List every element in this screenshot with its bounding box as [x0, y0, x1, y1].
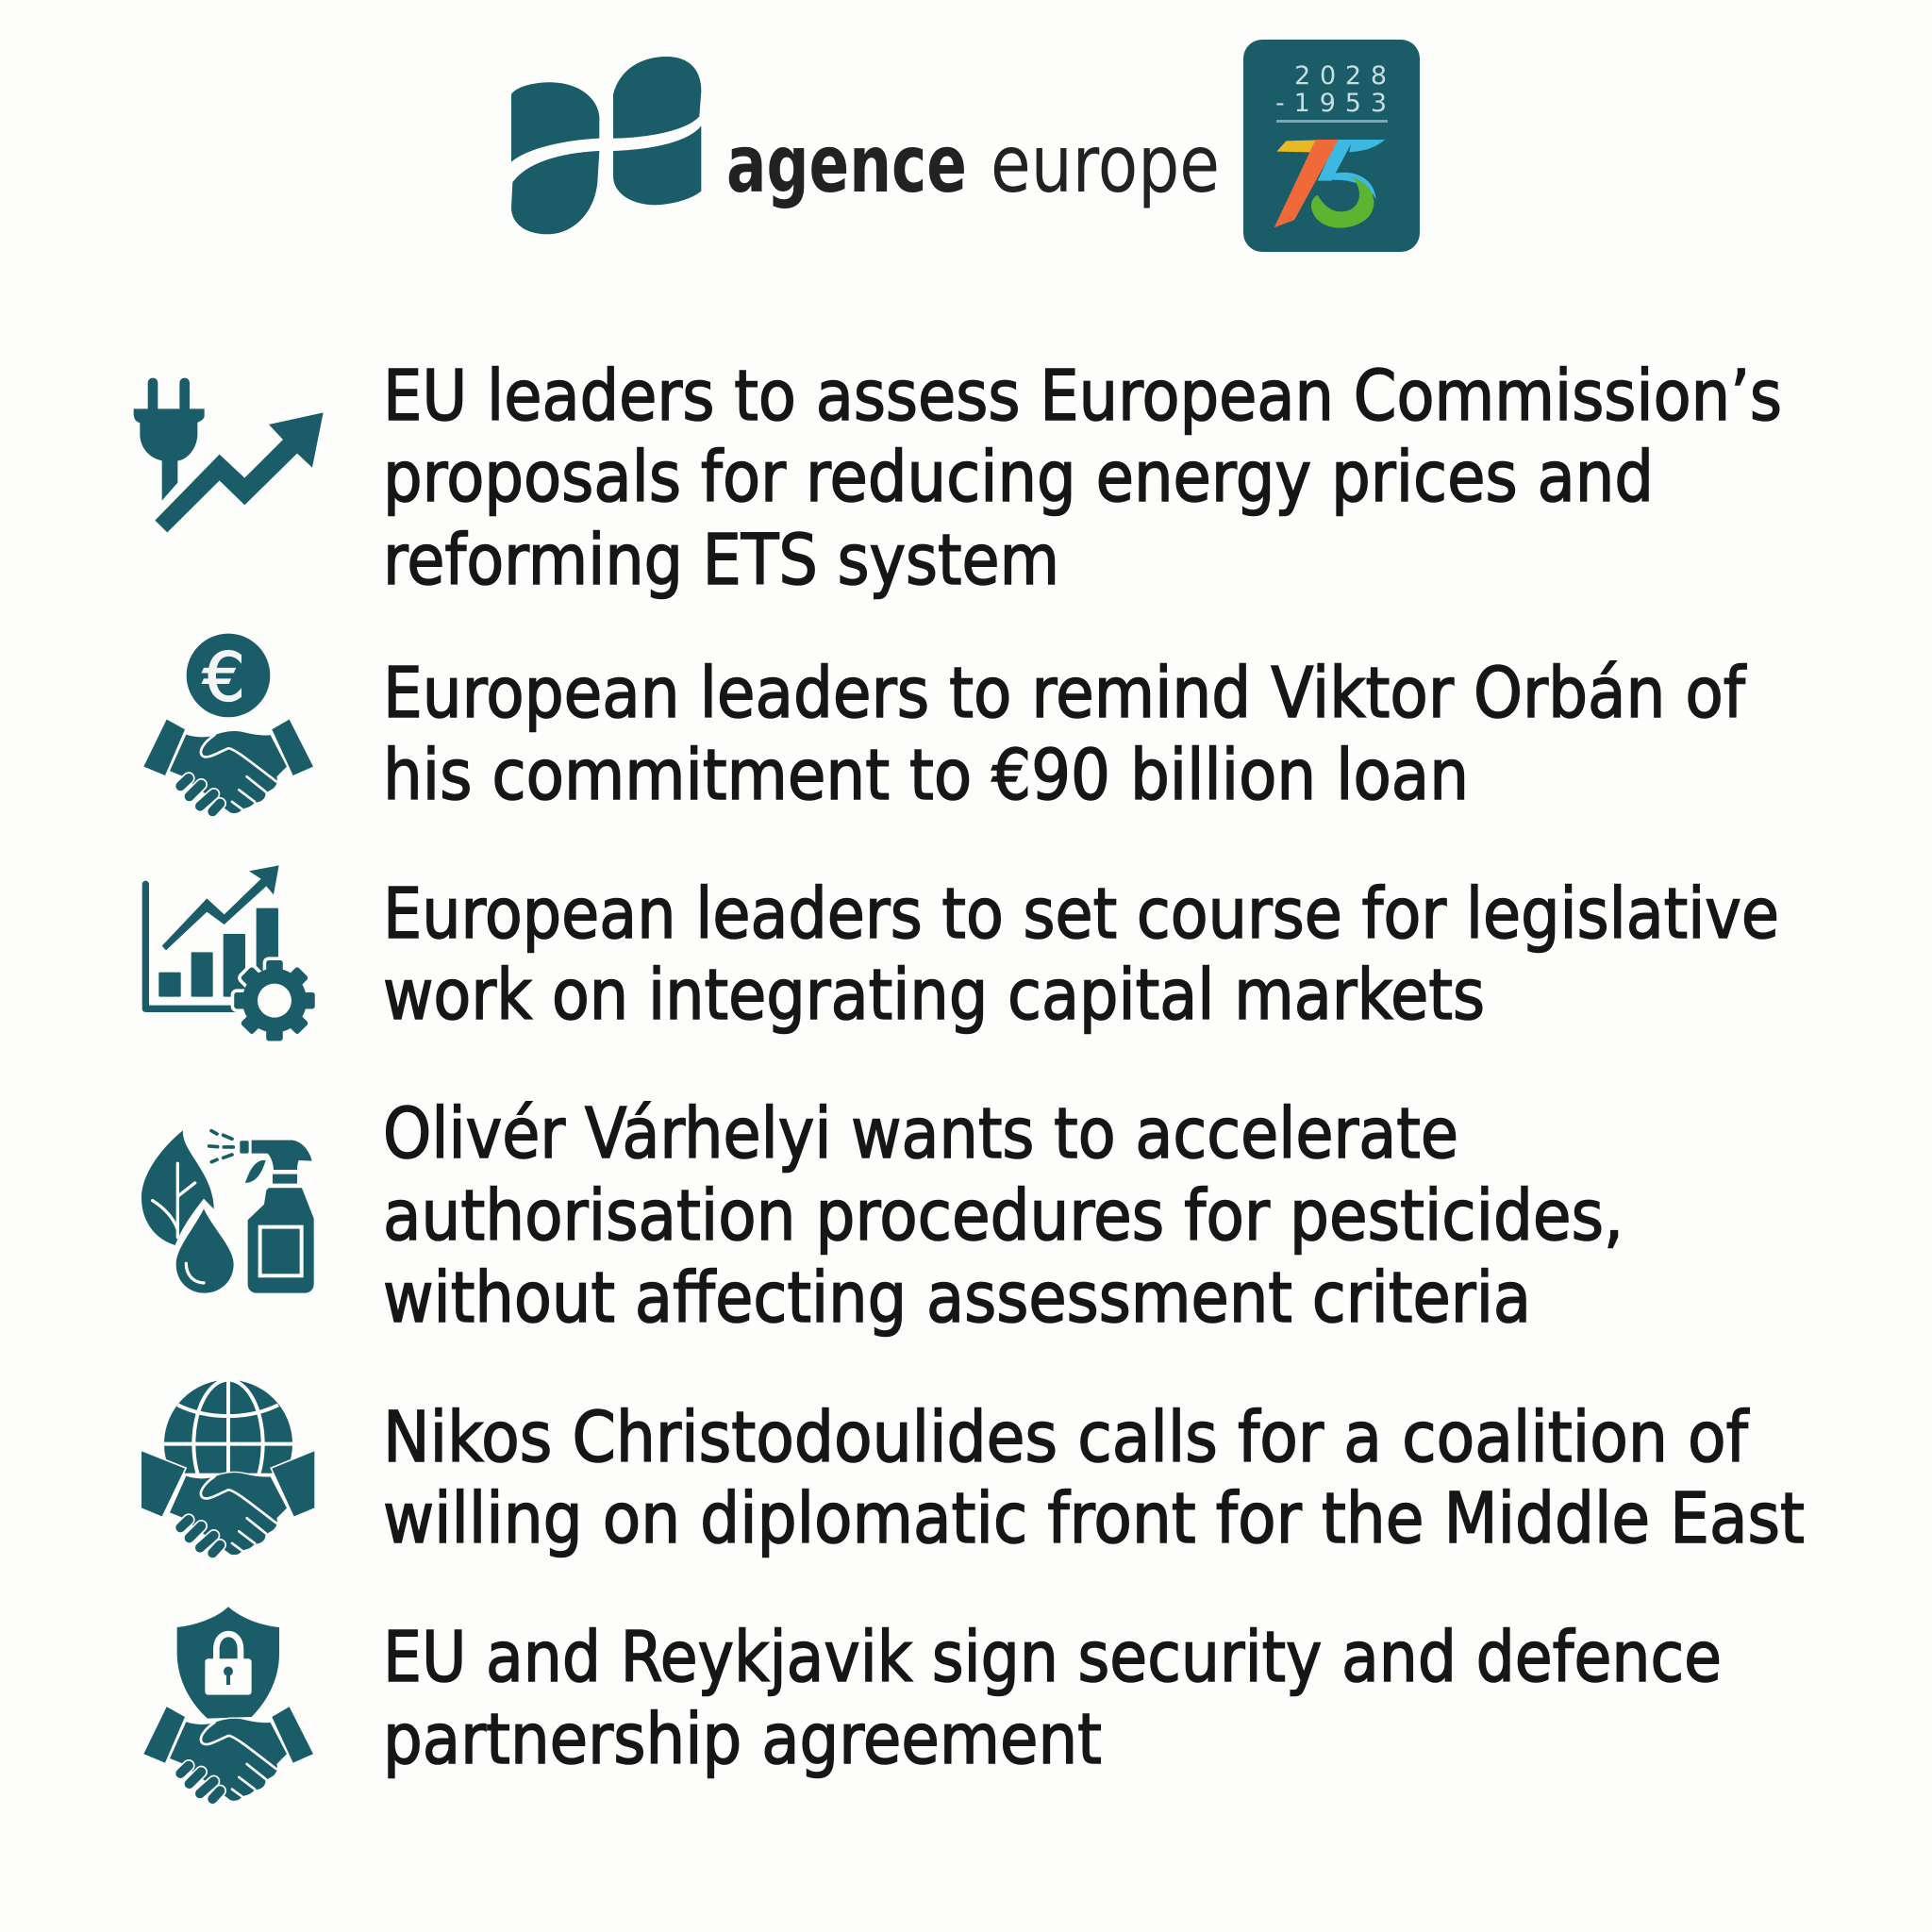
wordmark: europe	[991, 118, 1220, 210]
text: item 2	[383, 653, 1747, 816]
icon: plug and rising arrow	[134, 378, 324, 532]
icon: globe and handshake	[142, 1377, 314, 1555]
item 3: capital markets	[145, 865, 1779, 1041]
icon: euro coin and handshake	[143, 634, 313, 813]
text: item 4: Olivér Várhelyi wants to accelerate	[383, 1093, 1458, 1174]
anniversary badge	[1243, 40, 1420, 252]
text: item 6: partnership agreement	[383, 1699, 1102, 1780]
text: item 5	[383, 1397, 1805, 1559]
icon: leaf, drop and spray bottle	[142, 1130, 314, 1293]
text: item 3: European leaders to set course for legislative	[383, 874, 1779, 955]
header logo group	[511, 40, 1420, 252]
wordmark: agence	[726, 118, 967, 210]
text: item 4: authorisation procedures for pesticides,	[383, 1175, 1624, 1257]
text: item 1: EU leaders to assess European Commission’s	[383, 356, 1782, 437]
text: item 2: European leaders to remind Viktor Orbán of	[383, 653, 1747, 734]
text: item 3: work on integrating capital markets	[383, 955, 1485, 1036]
item 5: Middle East coalition	[142, 1377, 1805, 1559]
text: item 5: Nikos Christodoulides calls for a coalition of	[383, 1397, 1750, 1478]
text: item 3	[383, 874, 1779, 1036]
anniversary badge: 2028	[1294, 61, 1387, 91]
text: item 6	[383, 1617, 1722, 1780]
text: item 6: EU and Reykjavik sign security and defence	[383, 1617, 1722, 1698]
logo mark: four lobes	[511, 57, 701, 234]
text: item 4: without affecting assessment criteria	[383, 1257, 1531, 1339]
text: item 1: proposals for reducing energy prices and	[383, 437, 1654, 518]
text: item 1: reforming ETS system	[383, 520, 1059, 601]
icon: bar chart with arrow and gear	[145, 865, 315, 1041]
item 4: pesticides	[142, 1093, 1624, 1339]
text: item 1	[383, 356, 1782, 601]
wordmark	[726, 118, 1220, 210]
text: item 5: willing on diplomatic front for the Middle East	[383, 1478, 1805, 1559]
icon: euro coin and handshake: €	[203, 638, 245, 717]
icon: shield with lock and handshake	[143, 1607, 313, 1801]
anniversary badge: -1953	[1275, 89, 1387, 118]
text: item 4	[383, 1093, 1624, 1339]
item 1: energy prices	[134, 356, 1782, 601]
item 6: security partnership	[143, 1607, 1722, 1801]
text: item 2: his commitment to €90 billion loan	[383, 735, 1469, 816]
item 2: loan	[143, 634, 1747, 816]
